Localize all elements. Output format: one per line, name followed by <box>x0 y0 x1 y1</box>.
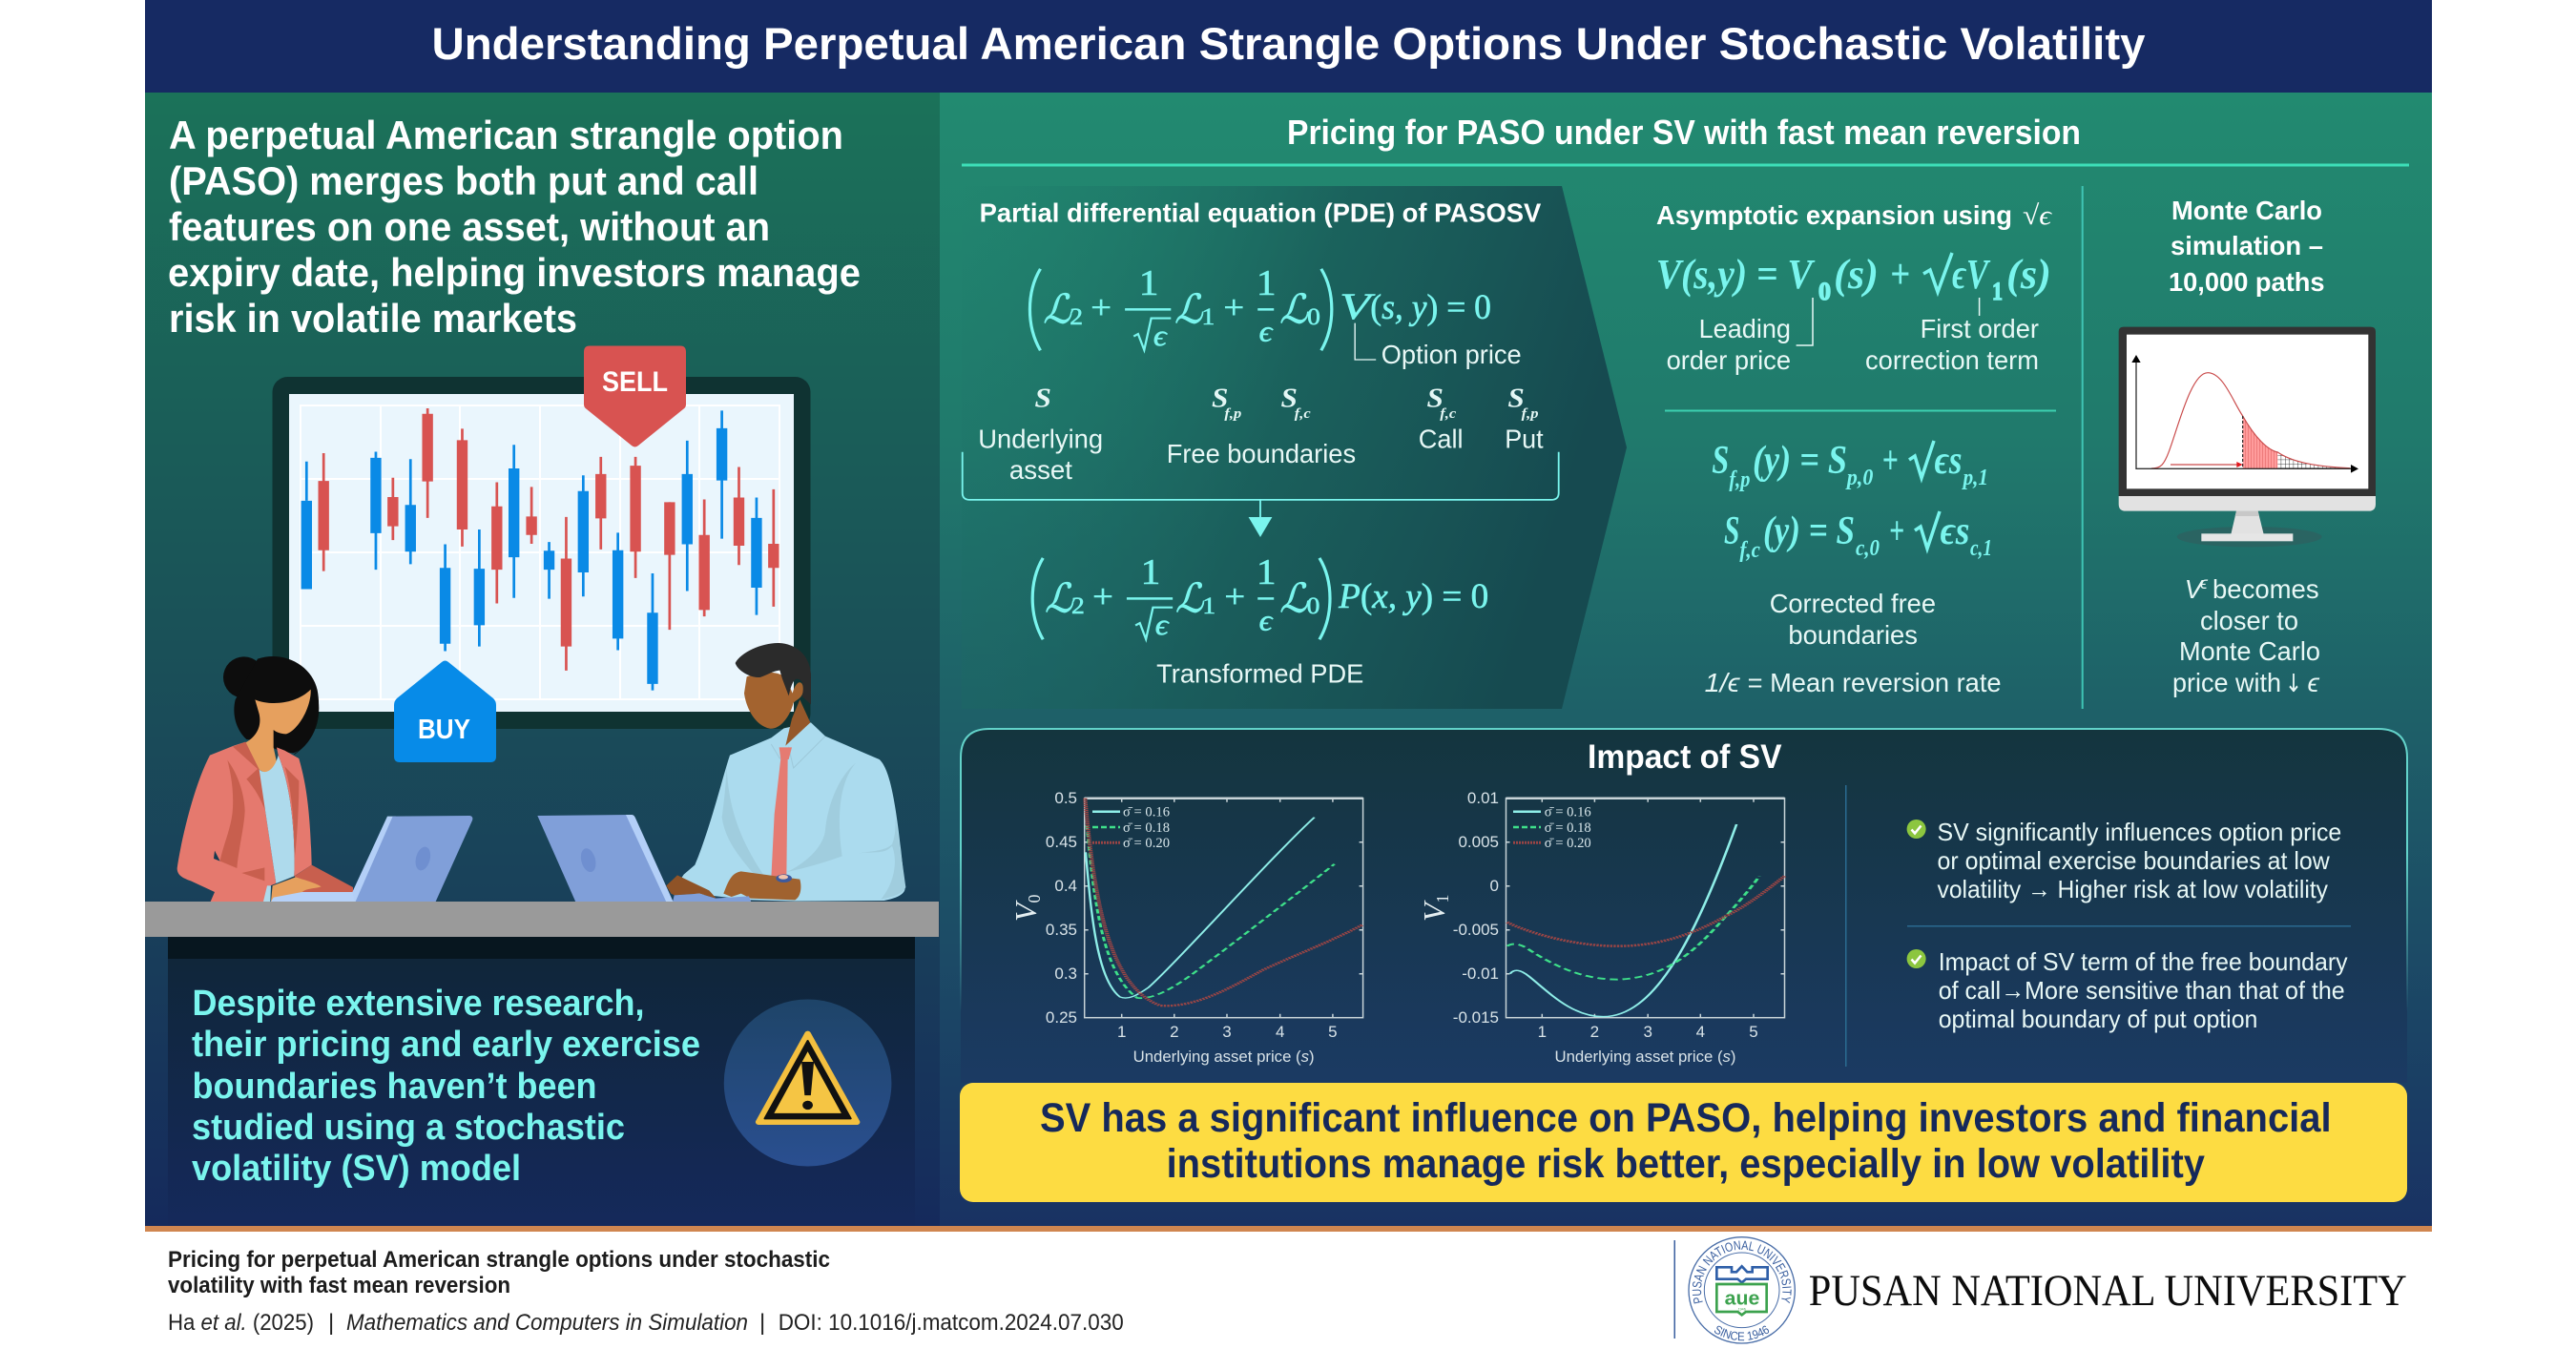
BUY tag: BUY <box>418 715 470 745</box>
label: free boundaries: S <box>1212 384 1228 413</box>
grey desk <box>145 902 939 937</box>
equation: PDE of PASOSV: 1 <box>1201 302 1215 330</box>
label: put: S <box>1507 384 1525 413</box>
Monte Carlo caption: ↓ <box>2285 670 2302 698</box>
equation: put free boundary: + <box>1882 439 1899 483</box>
equation: call free boundary: f,c <box>1739 538 1760 563</box>
panel: pricing methods <box>940 93 2432 1226</box>
line chart: V1 vs underlying asset price: σ̄ = 0.20 <box>1545 836 1591 851</box>
label: corrected free boundaries <box>1770 589 1936 650</box>
bullet: free boundary sensitivity: of call→More sensitive than that of the <box>1939 976 2345 1005</box>
equation: PDE of PASOSV: ℒ <box>1174 287 1204 332</box>
line chart: V0 vs underlying asset price: Underlying asset price (s) <box>1133 1048 1315 1066</box>
equation: put free boundary: p,1 <box>1962 466 1988 490</box>
icon: warning triangle <box>724 999 891 1167</box>
orange divider <box>145 1226 2432 1232</box>
research gap text: Despite extensive research, <box>193 984 645 1024</box>
conclusion banner <box>960 1083 2407 1202</box>
logo: Pusan National University seal: SINCE 1946 <box>1714 1326 1769 1341</box>
equation: PDE of PASOSV: 2 <box>1070 302 1083 330</box>
label: put: f,p <box>1522 406 1539 422</box>
equation: value expansion: (s) <box>1834 251 1879 298</box>
SELL tag: SELL <box>602 366 668 398</box>
label: underlying asset: S <box>1034 384 1051 413</box>
logo: university name: PUSAN NATIONAL UNIVERSITY <box>1809 1266 2407 1316</box>
citation block: | <box>328 1310 334 1336</box>
line chart: V1 vs underlying asset price: 1 <box>1433 894 1452 903</box>
equation: put free boundary: f,p <box>1729 467 1750 492</box>
intro text block: risk in volatile markets <box>169 296 577 341</box>
label: first order correction term <box>1865 314 2039 375</box>
line chart: V0 vs underlying asset price: 4 <box>1276 1023 1284 1041</box>
line chart: V0 vs underlying asset price: σ̄ = 0.20 <box>1123 836 1170 851</box>
line chart: V1 vs underlying asset price: 0.005 <box>1458 833 1499 851</box>
research gap text: their pricing and early exercise <box>192 1025 700 1065</box>
intro text block: expiry date, helping investors manage <box>168 250 861 295</box>
line chart: V0 vs underlying asset price: σ̄ = 0.18 <box>1123 820 1170 836</box>
logo: Pusan National University seal: PUSAN NATIONAL UNIVERSITY <box>1693 1240 1792 1303</box>
equation: PDE of PASOSV: ϵ <box>1259 316 1274 348</box>
label: underlying asset: asset <box>1009 456 1072 486</box>
equation: PDE of PASOSV: ϵ <box>1153 320 1169 352</box>
equation: put free boundary: S <box>1712 439 1729 483</box>
Monte Carlo caption: ϵ <box>2200 573 2209 592</box>
equation: transformed PDE <box>1032 552 1488 641</box>
line chart: V1 vs underlying asset price: σ̄ = 0.18 <box>1545 820 1591 836</box>
label: first order correction term: First order <box>1921 314 2039 343</box>
bullet: SV influence <box>1907 818 2341 903</box>
Monte Carlo caption: price with <box>2172 668 2281 697</box>
label: call: Call <box>1419 425 1464 454</box>
man at laptop <box>537 643 905 902</box>
intro text block: features on one asset, without an <box>169 204 770 249</box>
research gap text: studied using a stochastic <box>192 1108 625 1148</box>
bullet: SV influence: or optimal exercise boundaries at low <box>1937 846 2330 875</box>
equation: call free boundary: (y) = S <box>1763 509 1855 553</box>
intro text block: A perpetual American strangle option <box>169 113 843 157</box>
panel: left introduction <box>145 93 940 1226</box>
conclusion banner: institutions manage risk better, especially in low volatility <box>1167 1141 2205 1187</box>
equation: transformed PDE: ℒ <box>1279 576 1309 621</box>
label: leading order price <box>1667 298 1980 375</box>
label: free boundaries <box>1167 384 1356 469</box>
equation: transformed PDE: 0 <box>1307 591 1319 619</box>
research gap text: boundaries haven’t been <box>193 1067 597 1107</box>
impact heading: Impact of SV <box>1588 738 1782 776</box>
line chart: V0 vs underlying asset price: 0.45 <box>1046 833 1077 851</box>
BUY tag <box>394 660 496 762</box>
Monte Carlo caption: becomes <box>2212 574 2319 604</box>
equation: PDE of PASOSV: 1 <box>1139 263 1158 303</box>
label: call <box>1419 384 1464 454</box>
line chart: V1 vs underlying asset price: σ̄ = 0.16 <box>1545 805 1591 820</box>
asymptotic heading: √ϵ <box>2023 200 2052 231</box>
SELL tag <box>584 345 686 446</box>
line chart: V1 vs underlying asset price: -0.015 <box>1453 1008 1499 1027</box>
line chart: V0 vs underlying asset price: 0.5 <box>1054 789 1077 807</box>
equation: PDE of PASOSV: + <box>1223 289 1244 327</box>
equation: transformed PDE: ϵ <box>1155 609 1170 641</box>
logo: Pusan National University seal: aue <box>1725 1289 1759 1310</box>
Monte Carlo caption: V <box>2185 574 2205 604</box>
line chart: V0 vs underlying asset price: 1 <box>1117 1023 1126 1041</box>
equation: value expansion: + <box>1890 251 1910 298</box>
equation: PDE of PASOSV: 1 <box>1257 263 1277 303</box>
citation block: Ha et al. (2025) <box>168 1310 314 1336</box>
equation: transformed PDE: 1 <box>1202 591 1215 619</box>
icon: monitor with distribution curve <box>2119 327 2376 547</box>
citation block: Mathematics and Computers in Simulation <box>346 1310 748 1336</box>
research gap text: volatility (SV) model <box>192 1149 521 1189</box>
equation: transformed PDE: 2 <box>1071 591 1085 619</box>
bullet: free boundary sensitivity: optimal boundary of put option <box>1939 1005 2257 1033</box>
panel: asymptotic expansion <box>1656 200 2056 697</box>
line chart: V0 vs underlying asset price: 0 <box>1025 894 1044 903</box>
bullet: free boundary sensitivity: Impact of SV term of the free boundary <box>1939 947 2348 976</box>
line chart: V1 vs underlying asset price: 4 <box>1696 1023 1705 1041</box>
equation: put free boundary <box>1712 439 1988 492</box>
line chart: V1 vs underlying asset price: 0.01 <box>1467 789 1499 807</box>
section heading <box>962 113 2409 166</box>
citation block: Pricing for perpetual American strangle options under stochastic <box>168 1247 830 1273</box>
label: corrected free boundaries: Corrected free <box>1770 589 1936 618</box>
label: put <box>1505 384 1544 454</box>
equation: call free boundary: c,1 <box>1970 536 1992 561</box>
conclusion banner: SV has a significant influence on PASO, helping investors and financial <box>1040 1095 2332 1141</box>
equation: put free boundary: ϵs <box>1935 439 1962 483</box>
woman at laptop <box>177 656 472 902</box>
equation: call free boundary: c,0 <box>1856 536 1880 561</box>
label: free boundaries: S <box>1281 384 1298 413</box>
label: leading order price: order price <box>1667 345 1791 375</box>
label: transformed PDE: Transformed PDE <box>1156 659 1363 689</box>
title banner <box>145 0 2432 93</box>
equation: transformed PDE: 1 <box>1141 552 1160 592</box>
line chart: V0 vs underlying asset price: 5 <box>1328 1023 1338 1041</box>
equation: PDE of PASOSV: ℒ <box>1279 287 1309 332</box>
label: mean reversion rate: = Mean reversion rate <box>1748 668 2002 697</box>
line chart: V1 vs underlying asset price: 0 <box>1490 877 1499 895</box>
Monte Carlo caption <box>2172 573 2320 698</box>
line chart: V0 vs underlying asset price: V <box>1008 903 1043 922</box>
equation: value expansion: V(s,y) = V <box>1656 251 1816 298</box>
label: call: S <box>1426 384 1444 413</box>
section heading: Pricing for PASO under SV with fast mean reversion <box>1287 113 2081 152</box>
label: leading order price: Leading <box>1699 314 1791 343</box>
label: free boundaries: f,c <box>1295 406 1311 422</box>
citation block <box>168 1247 1124 1336</box>
equation: PDE of PASOSV: + <box>1091 289 1111 327</box>
logo: Pusan National University seal: 1946 <box>1738 1307 1746 1311</box>
panel: Monte Carlo simulation <box>2119 196 2376 698</box>
Monte Carlo caption: closer to <box>2200 606 2298 635</box>
line chart: V0 vs underlying asset price: 2 <box>1170 1023 1179 1041</box>
line chart: V1 vs underlying asset price: 2 <box>1590 1023 1599 1041</box>
Monte Carlo caption: Monte Carlo <box>2179 636 2320 666</box>
Monte Carlo heading: 10,000 paths <box>2169 267 2325 297</box>
citation block: | <box>759 1310 765 1336</box>
equation: transformed PDE: ℒ <box>1045 576 1074 621</box>
equation: put free boundary: (y) = S <box>1753 439 1847 483</box>
intro text block: (PASO) merges both put and call <box>169 158 758 203</box>
title banner: Understanding Perpetual American Strangle Options Under Stochastic Volatility <box>431 18 2145 69</box>
equation: value expansion: (s) <box>2006 251 2051 298</box>
Monte Carlo heading: Monte Carlo <box>2171 196 2322 225</box>
Monte Carlo heading: simulation – <box>2171 231 2323 260</box>
equation: call free boundary: ϵs <box>1941 509 1969 553</box>
line chart: V1 vs underlying asset price: V <box>1417 903 1451 922</box>
equation: call free boundary: + <box>1889 509 1904 553</box>
equation: PDE of PASOSV: (s, y) = 0 <box>1370 288 1491 327</box>
label: underlying asset <box>978 384 1103 486</box>
label: mean reversion rate: 1/ϵ <box>1705 668 1740 697</box>
line chart: V1 vs underlying asset price: Underlying asset price (s) <box>1555 1048 1736 1066</box>
equation: transformed PDE: P(x, y) = 0 <box>1338 577 1488 616</box>
line chart: V1 vs underlying asset price: 3 <box>1643 1023 1652 1041</box>
equation: put free boundary: p,0 <box>1845 466 1873 490</box>
line chart: V1 vs underlying asset price: 5 <box>1749 1023 1758 1041</box>
equation: transformed PDE: ϵ <box>1259 605 1274 637</box>
line chart: V0 vs underlying asset price: σ̄ = 0.16 <box>1123 805 1170 820</box>
bracket with down arrow <box>963 452 1559 537</box>
equation: value expansion: ϵV <box>1952 251 1991 298</box>
label: put: Put <box>1505 425 1544 454</box>
equation: transformed PDE: + <box>1224 578 1245 616</box>
label: call: f,c <box>1440 406 1456 422</box>
equation: transformed PDE: + <box>1092 578 1113 616</box>
bullet: free boundary sensitivity <box>1907 947 2348 1033</box>
line chart: V0 vs underlying asset price: 0.4 <box>1054 877 1077 895</box>
equation: PDE of PASOSV: V <box>1340 286 1376 327</box>
line chart: V1 vs underlying asset price <box>1417 789 1784 1066</box>
PDE heading: Partial differential equation (PDE) of PASOSV <box>980 199 1541 228</box>
label: option price <box>1355 323 1522 370</box>
label: free boundaries: Free boundaries <box>1167 440 1356 469</box>
line chart: V1 vs underlying asset price: 1 <box>1538 1023 1547 1041</box>
label: option price: Option price <box>1381 341 1522 370</box>
equation: value expansion: 0 <box>1818 278 1831 305</box>
label: free boundaries: f,p <box>1224 406 1241 422</box>
label: corrected free boundaries: boundaries <box>1788 620 1918 650</box>
asymptotic heading: Asymptotic expansion using <box>1656 200 2012 230</box>
line chart: V1 vs underlying asset price: -0.01 <box>1462 965 1499 983</box>
panel: PDE arrow <box>962 186 1627 709</box>
panel: research gap <box>168 937 915 1226</box>
trading monitor with candlestick chart <box>273 377 811 729</box>
citation block: volatility with fast mean reversion <box>168 1273 510 1298</box>
line chart: V0 vs underlying asset price: 0.3 <box>1054 965 1077 983</box>
bullet: SV influence: volatility → Higher risk at low volatility <box>1937 875 2328 903</box>
equation: PDE of PASOSV: ℒ <box>1043 287 1072 332</box>
equation: value expansion <box>1656 251 2051 305</box>
intro text block <box>168 113 861 341</box>
equation: PDE of PASOSV <box>1029 263 1491 352</box>
panel: impact of SV <box>961 729 2407 1083</box>
line chart: V0 vs underlying asset price: 0.25 <box>1046 1008 1077 1027</box>
Monte Carlo heading <box>2169 196 2325 297</box>
line chart: V0 vs underlying asset price: 0.35 <box>1046 921 1077 939</box>
equation: transformed PDE: ℒ <box>1175 576 1204 621</box>
research gap text <box>192 984 700 1189</box>
label: first order correction term: correction term <box>1865 345 2039 375</box>
line chart: V0 vs underlying asset price <box>1008 789 1363 1066</box>
equation: transformed PDE: 1 <box>1257 552 1277 592</box>
label: underlying asset: Underlying <box>978 425 1103 454</box>
equation: call free boundary: S <box>1724 509 1739 553</box>
line chart: V1 vs underlying asset price: -0.005 <box>1453 921 1499 939</box>
logo: Pusan National University seal <box>1688 1236 1796 1344</box>
bullet: SV influence: SV significantly influences option price <box>1937 818 2341 846</box>
equation: value expansion: 1 <box>1992 278 2003 305</box>
citation block: DOI: 10.1016/j.matcom.2024.07.030 <box>779 1310 1124 1336</box>
Monte Carlo caption: ϵ <box>2307 668 2320 697</box>
equation: PDE of PASOSV: 0 <box>1307 302 1320 330</box>
line chart: V0 vs underlying asset price: 3 <box>1222 1023 1232 1041</box>
equation: call free boundary <box>1724 509 1992 563</box>
